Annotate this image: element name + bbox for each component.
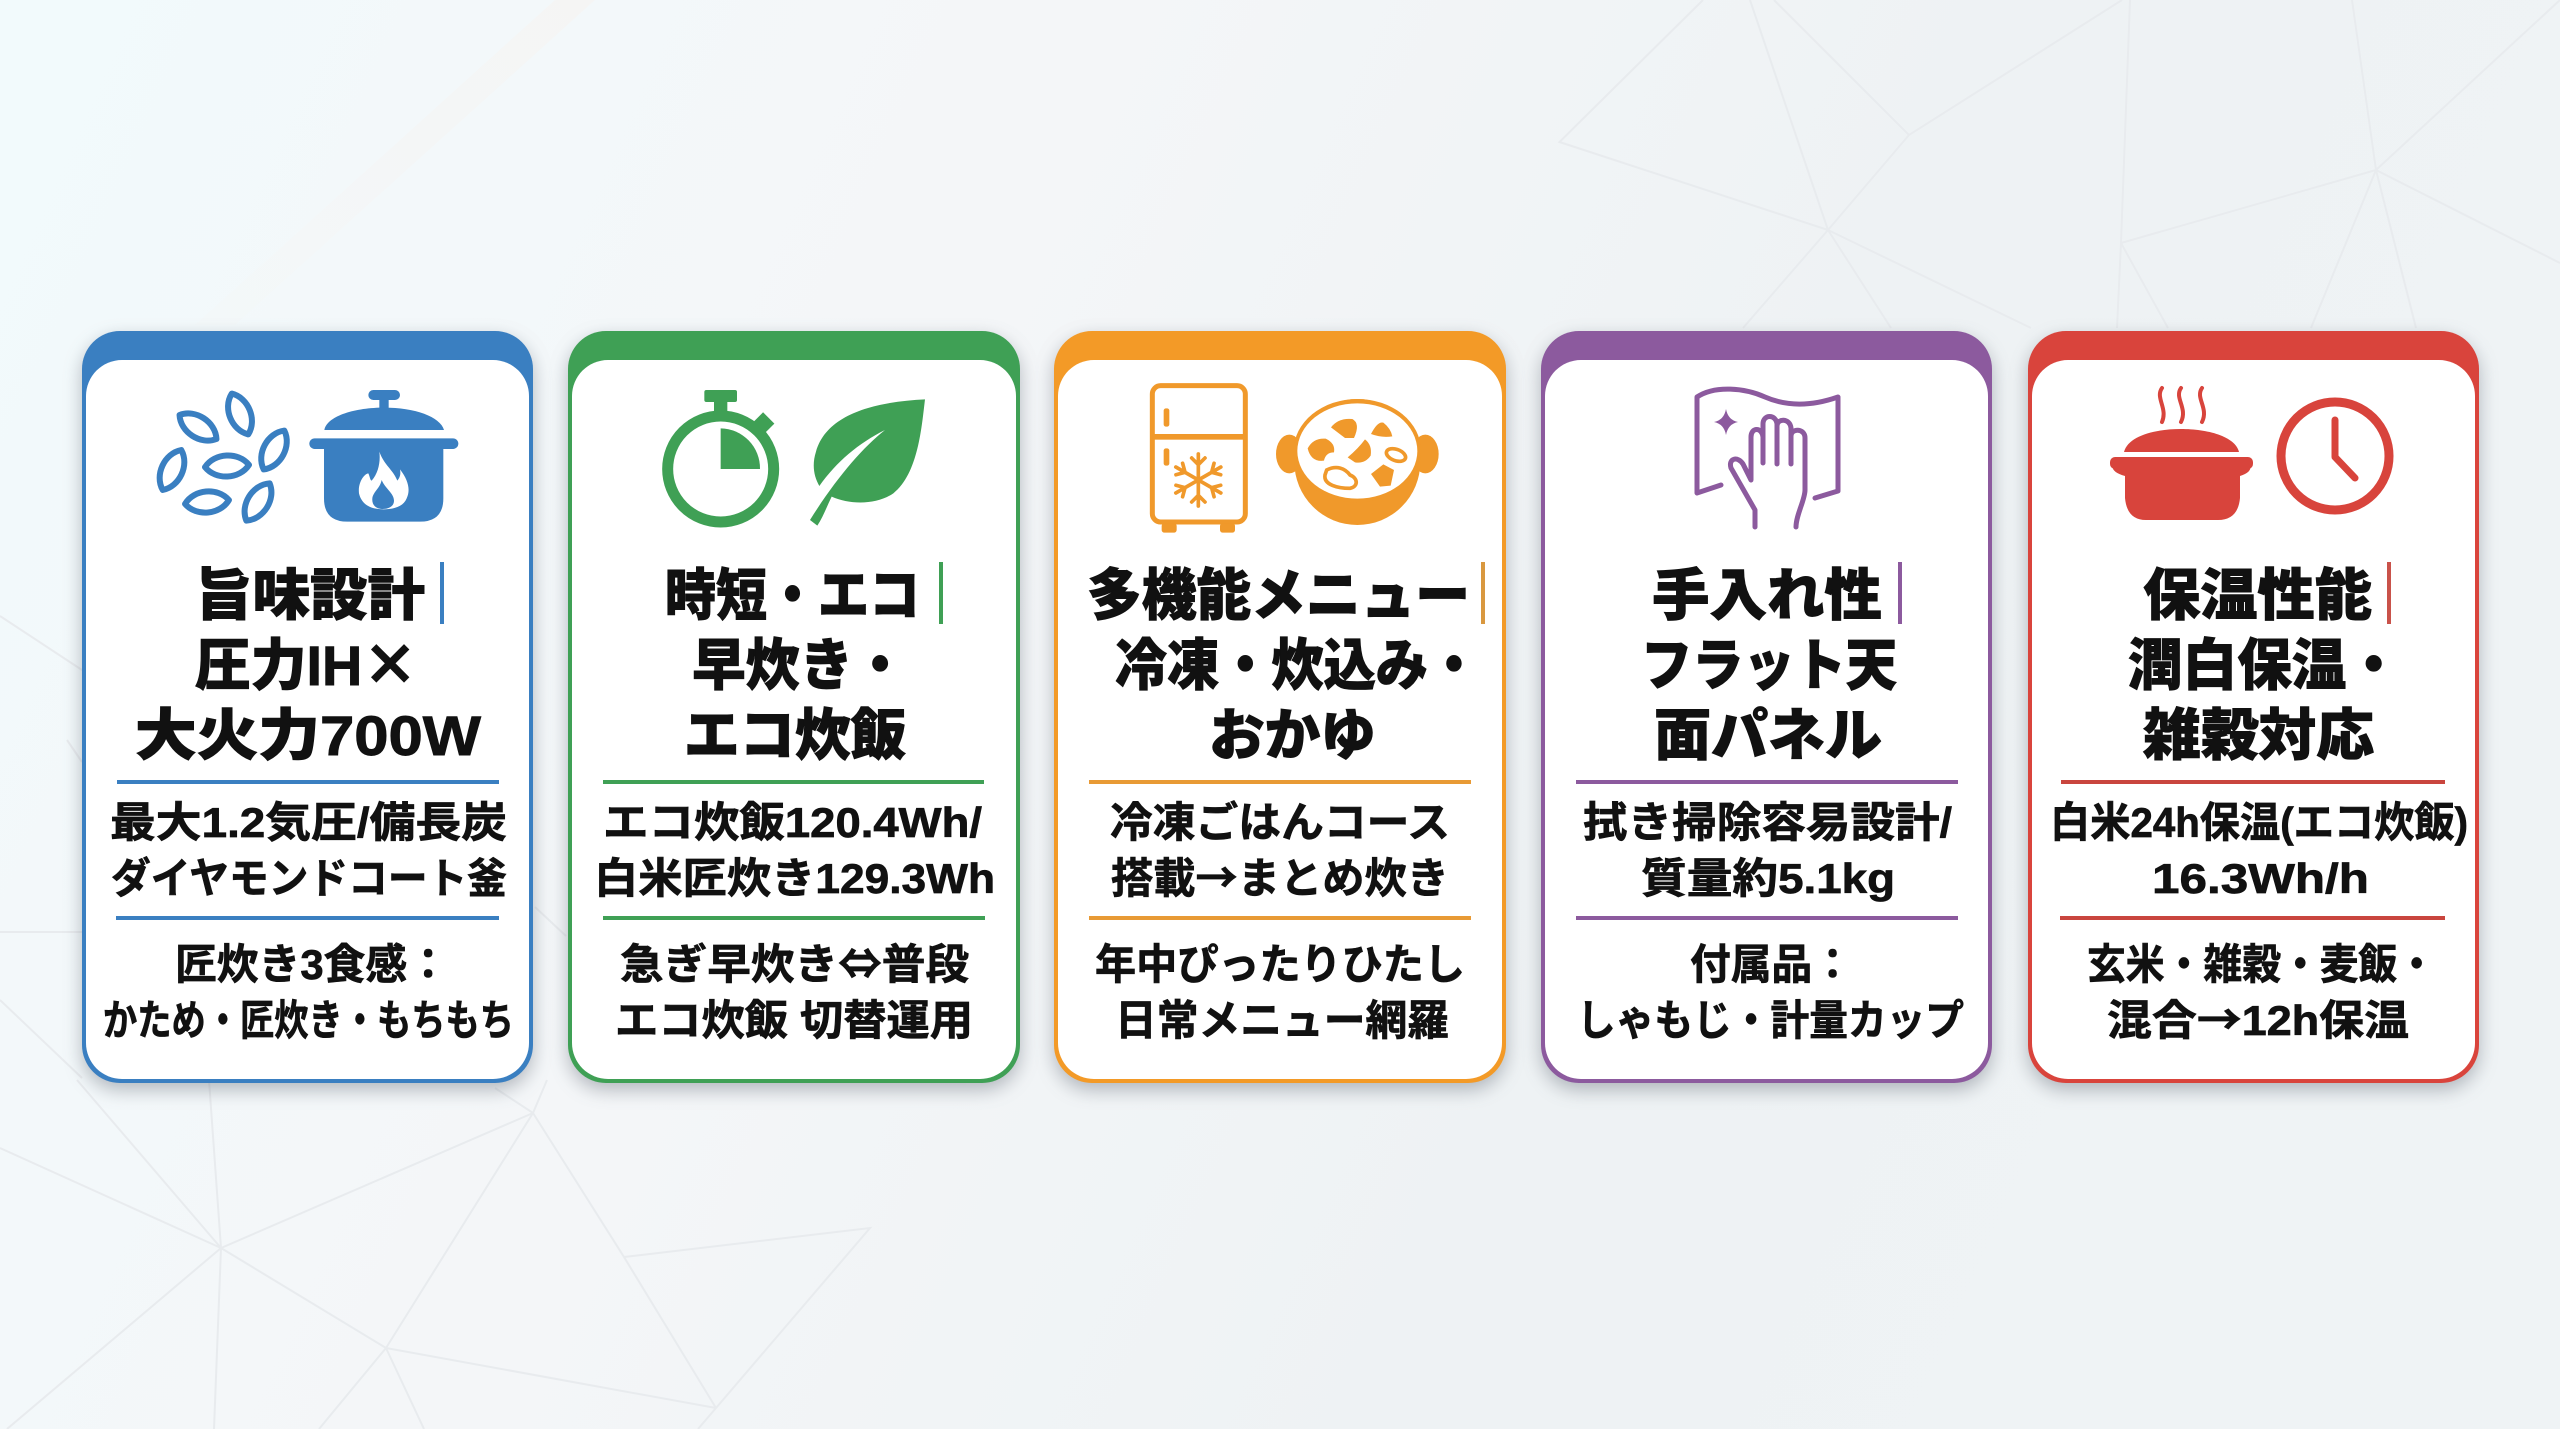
icon: rice grains xyxy=(153,390,294,526)
spec text xyxy=(1110,799,1450,906)
panel: card 3 multi-function menu xyxy=(1054,331,1506,1083)
spec text: 16.3Wh/h xyxy=(2152,855,2369,902)
spec text: ダイヤモンドコート釜 xyxy=(111,855,507,902)
icon: hot pot with ingredients xyxy=(1276,399,1439,525)
spec text xyxy=(2050,799,2468,902)
feature text xyxy=(2087,941,2436,1048)
spec text xyxy=(1583,799,1952,902)
spec text: 搭載→まとめ炊き xyxy=(1111,845,1449,906)
heading xyxy=(2128,562,2401,767)
heading xyxy=(135,562,481,767)
feature text: 混合→12h保温 xyxy=(2107,987,2409,1048)
heading: 時短・エコ xyxy=(665,564,920,627)
heading: 旨味設計 xyxy=(195,564,425,627)
panel: card 2 time saving and eco xyxy=(568,331,1020,1083)
icon: hand wiping cloth xyxy=(1697,389,1838,527)
feature text xyxy=(1095,941,1465,1044)
heading xyxy=(665,562,943,767)
card frame orange xyxy=(1054,331,1506,1083)
card frame green xyxy=(568,331,1020,1083)
heading: 潤白保温・ xyxy=(2128,634,2401,697)
heading: フラット天 xyxy=(1641,634,1897,697)
feature text: 日常メニュー網羅 xyxy=(1115,997,1449,1044)
spec text xyxy=(594,799,995,902)
icon: stopwatch xyxy=(668,390,774,522)
panel: card 5 keep warm performance xyxy=(2028,331,2479,1083)
feature text: 匠炊き3食感： xyxy=(175,941,449,988)
heading: 多機能メニュー xyxy=(1087,564,1470,627)
heading: おかゆ xyxy=(1209,704,1376,767)
feature text: 急ぎ早炊き⇔普段 xyxy=(620,931,969,992)
heading xyxy=(1087,562,1485,767)
heading: 雑穀対応 xyxy=(2143,704,2374,767)
icon: steaming pot xyxy=(2110,388,2253,520)
icon: pot with flame xyxy=(309,390,458,522)
heading: 大火力700W xyxy=(135,704,481,767)
heading: 冷凍・炊込み・ xyxy=(1115,634,1480,697)
heading: 圧力IH× xyxy=(195,621,418,702)
feature text: 玄米・雑穀・麦飯・ xyxy=(2087,941,2436,988)
feature text: かため・匠炊き・もちもち xyxy=(103,997,514,1044)
card frame purple xyxy=(1541,331,1992,1083)
heading: 早炊き・ xyxy=(692,634,907,697)
card frame red xyxy=(2028,331,2479,1083)
heading: エコ炊飯 xyxy=(684,704,906,767)
panel: card 1 umami design xyxy=(82,331,533,1083)
icon: freezer with snowflake xyxy=(1152,386,1245,533)
spec text xyxy=(110,799,507,902)
heading: 手入れ性 xyxy=(1652,564,1882,627)
spec text: 質量約5.1kg xyxy=(1641,855,1895,902)
heading: 面パネル xyxy=(1654,704,1882,767)
panel: card 4 easy maintenance xyxy=(1541,331,1992,1083)
icon: clock xyxy=(2281,402,2389,510)
spec text: 最大1.2気圧/備長炭 xyxy=(110,799,507,846)
spec text: 白米匠炊き129.3Wh xyxy=(594,855,995,902)
feature text xyxy=(103,941,514,1044)
heading xyxy=(1641,562,1902,767)
spec text: エコ炊飯120.4Wh/ xyxy=(603,799,982,846)
feature text xyxy=(615,931,973,1044)
heading: 保温性能 xyxy=(2143,564,2372,627)
feature text: しゃもじ・計量カップ xyxy=(1577,997,1964,1044)
spec text: 白米24h保温(エコ炊飯) xyxy=(2050,799,2468,846)
feature text: 年中ぴったりひたし xyxy=(1095,941,1465,988)
feature text: エコ炊飯 切替運用 xyxy=(615,997,973,1044)
feature text: 付属品： xyxy=(1690,941,1853,988)
spec text: 冷凍ごはんコース xyxy=(1110,799,1450,846)
card frame blue xyxy=(82,331,533,1083)
spec text: 拭き掃除容易設計/ xyxy=(1583,799,1952,846)
icon: leaf xyxy=(810,399,925,526)
feature text xyxy=(1577,941,1964,1044)
